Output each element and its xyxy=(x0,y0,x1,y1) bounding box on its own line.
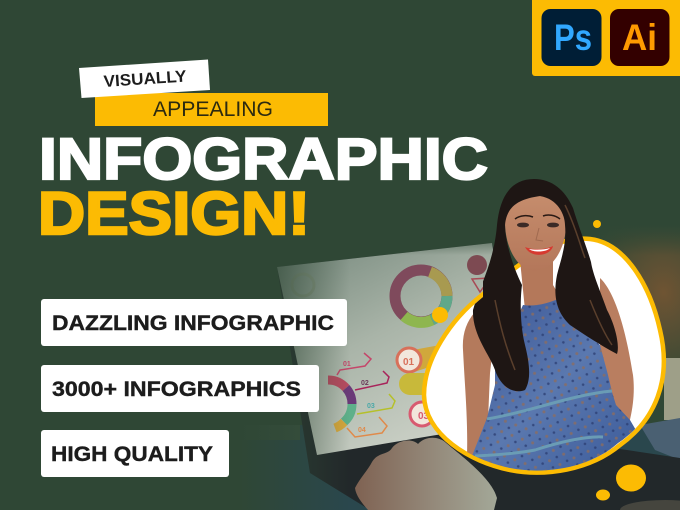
portrait blob xyxy=(424,239,664,473)
semicircle chart with step labels xyxy=(328,353,395,437)
tag: appealing xyxy=(95,93,328,126)
tag: appealing: APPEALING xyxy=(153,98,273,121)
background photo: laptop on desk: 01 xyxy=(403,357,415,368)
tag: visually: VISUALLY xyxy=(103,68,187,91)
title: INFOGRAPHIC: INFOGRAPHIC xyxy=(39,127,488,192)
feature label: dazzling infographic xyxy=(41,299,347,346)
nose xyxy=(536,228,543,241)
badge: software icons xyxy=(532,0,680,76)
feature label: 3000+ infographics: 3000+ INFOGRAPHICS xyxy=(52,378,301,401)
hand over keyboard xyxy=(355,438,497,510)
right arm xyxy=(598,278,634,462)
icon: Illustrator: Ai xyxy=(622,17,657,58)
lighter laptop corner xyxy=(620,500,680,510)
icon: Illustrator xyxy=(610,9,670,66)
face xyxy=(505,196,566,271)
dress tiers xyxy=(487,391,612,419)
hair highlights xyxy=(495,205,612,370)
icon: Photoshop xyxy=(542,9,602,66)
tag: visually xyxy=(79,60,210,98)
wall tint behind the portrait xyxy=(570,225,680,360)
eyebrows xyxy=(515,215,560,219)
feature label: high quality: HIGH QUALITY xyxy=(51,443,213,466)
small icon on screen xyxy=(292,274,314,296)
background photo: laptop on desk: 01 xyxy=(343,361,351,368)
background photo: laptop on desk: 03 xyxy=(367,403,375,410)
smile xyxy=(525,246,553,255)
icon: Photoshop: Ps xyxy=(554,17,592,58)
hair xyxy=(473,179,618,391)
title: DESIGN!: DESIGN! xyxy=(38,180,310,247)
feature label: dazzling infographic: DAZZLING INFOGRAPHIC xyxy=(52,312,334,335)
fade photo into the green background xyxy=(240,230,350,510)
pill steps on screen xyxy=(413,345,445,372)
dress print xyxy=(476,302,632,470)
feature label: 3000+ infographics xyxy=(41,365,319,412)
background photo: laptop on desk: 02 xyxy=(361,380,369,387)
laptop body xyxy=(277,243,680,510)
left arm xyxy=(462,314,492,461)
neck and chest xyxy=(520,262,556,306)
dress xyxy=(472,298,640,473)
laptop screen xyxy=(277,243,520,455)
donut chart on screen xyxy=(395,270,447,322)
background photo: laptop on desk: 04 xyxy=(358,427,366,434)
background photo: laptop on desk xyxy=(240,225,680,510)
background photo: laptop on desk: 03 xyxy=(418,411,430,422)
decorative yellow dots xyxy=(432,220,646,500)
desk xyxy=(240,425,680,510)
feature label: high quality xyxy=(41,430,229,477)
portrait of a woman xyxy=(463,179,640,473)
eyes xyxy=(517,223,529,227)
